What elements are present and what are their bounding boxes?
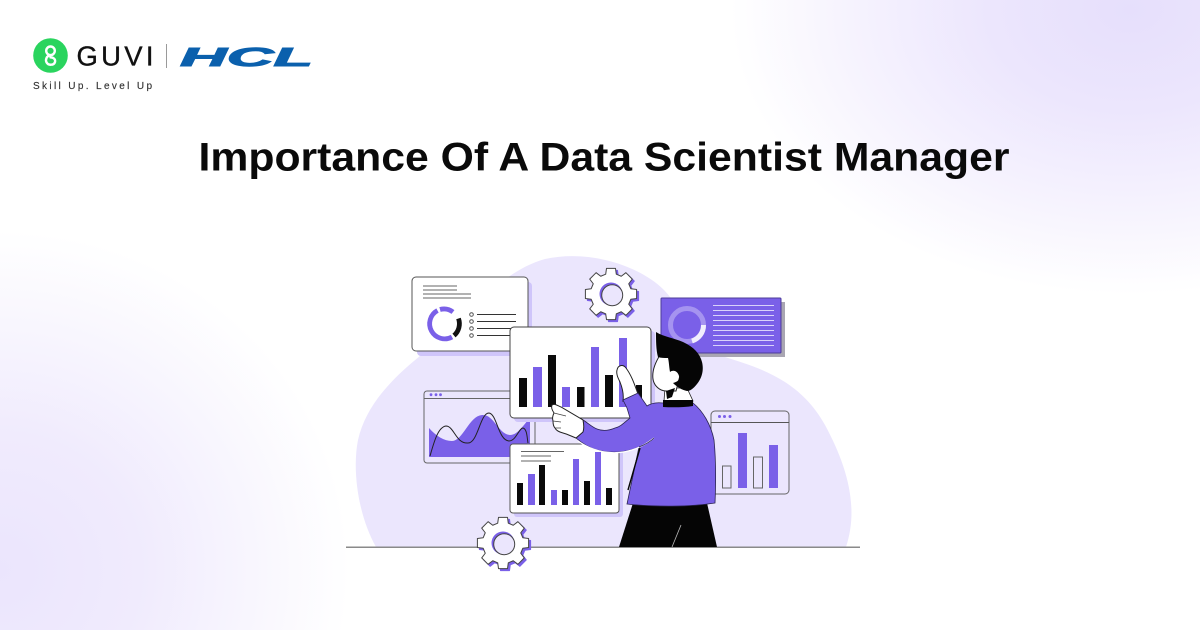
raised hand (617, 366, 638, 401)
hair (656, 332, 703, 391)
panel: donut card (412, 277, 532, 356)
title: Importance Of A Data Scientist Manager (198, 136, 1009, 180)
logo divider (166, 44, 167, 68)
window dots (718, 415, 732, 418)
panel: main bar chart card (510, 327, 655, 422)
area fill (429, 415, 530, 457)
icon: bottom gear (477, 517, 531, 571)
bars (519, 355, 642, 407)
bars (722, 466, 731, 488)
icon: top gear (585, 268, 639, 322)
trend line (430, 413, 528, 456)
neck shadow (666, 388, 675, 399)
legend rows (470, 313, 516, 337)
card shadow (417, 282, 532, 356)
HCL wordmark: HCL (180, 42, 313, 72)
window dots (430, 393, 442, 396)
text lines (713, 306, 774, 346)
background blob (356, 256, 851, 547)
face (653, 355, 684, 391)
ring chart (670, 308, 704, 342)
logo: GUVI and HCL (33, 38, 313, 92)
pointing hand (552, 404, 584, 438)
donut chart (430, 309, 459, 339)
panel: purple donut card (661, 298, 785, 357)
panel: lower bar chart card (510, 444, 623, 517)
neck (664, 388, 693, 401)
card text lines (521, 452, 564, 461)
tagline: Skill Up. Level Up (33, 81, 152, 92)
collar (663, 400, 693, 407)
panel: right bar chart card (711, 411, 789, 494)
ground line (346, 546, 860, 548)
shirt with arms (576, 393, 716, 506)
person pointing at charts (552, 332, 717, 547)
GUVI wordmark: GUVI (76, 40, 154, 72)
torso edge (628, 448, 640, 490)
panel: area chart card (424, 391, 535, 463)
sleeve highlight (578, 438, 654, 453)
trousers (619, 503, 717, 547)
illustration: data scientist manager with dashboards (346, 256, 860, 571)
card text lines (423, 286, 471, 298)
icon: GUVI green circle (33, 38, 68, 73)
finger creases (553, 413, 566, 428)
bars (517, 465, 612, 505)
